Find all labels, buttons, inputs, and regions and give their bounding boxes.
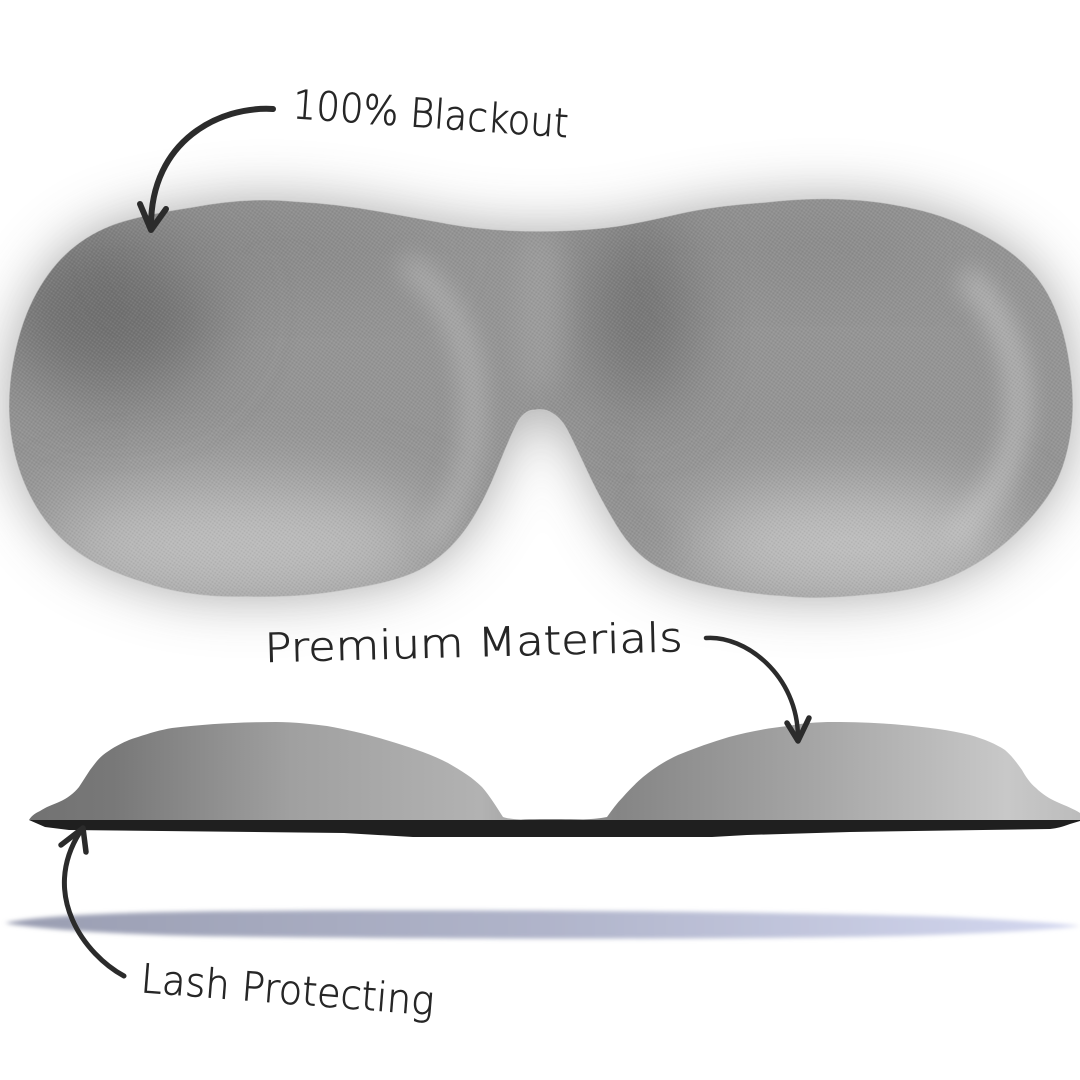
mask rim xyxy=(9,199,1073,598)
mask front view xyxy=(0,165,1080,632)
mask body xyxy=(9,199,1073,598)
mask side view xyxy=(29,722,1080,837)
label: Premium Materials: Premium Materials xyxy=(264,615,683,672)
floor shadow xyxy=(5,910,1080,939)
mask shading xyxy=(10,200,1072,598)
mask drop shadow xyxy=(9,199,1073,598)
label: Lash Protecting: Lash Protecting xyxy=(139,956,436,1025)
black base xyxy=(29,819,1080,837)
label: 100% Blackout: 100% Blackout xyxy=(291,82,570,147)
arrow: Premium Materials xyxy=(706,638,809,741)
foam cups xyxy=(29,722,1080,820)
arrow: Lash Protecting xyxy=(61,828,124,976)
arrow: 100% Blackout xyxy=(140,109,273,230)
